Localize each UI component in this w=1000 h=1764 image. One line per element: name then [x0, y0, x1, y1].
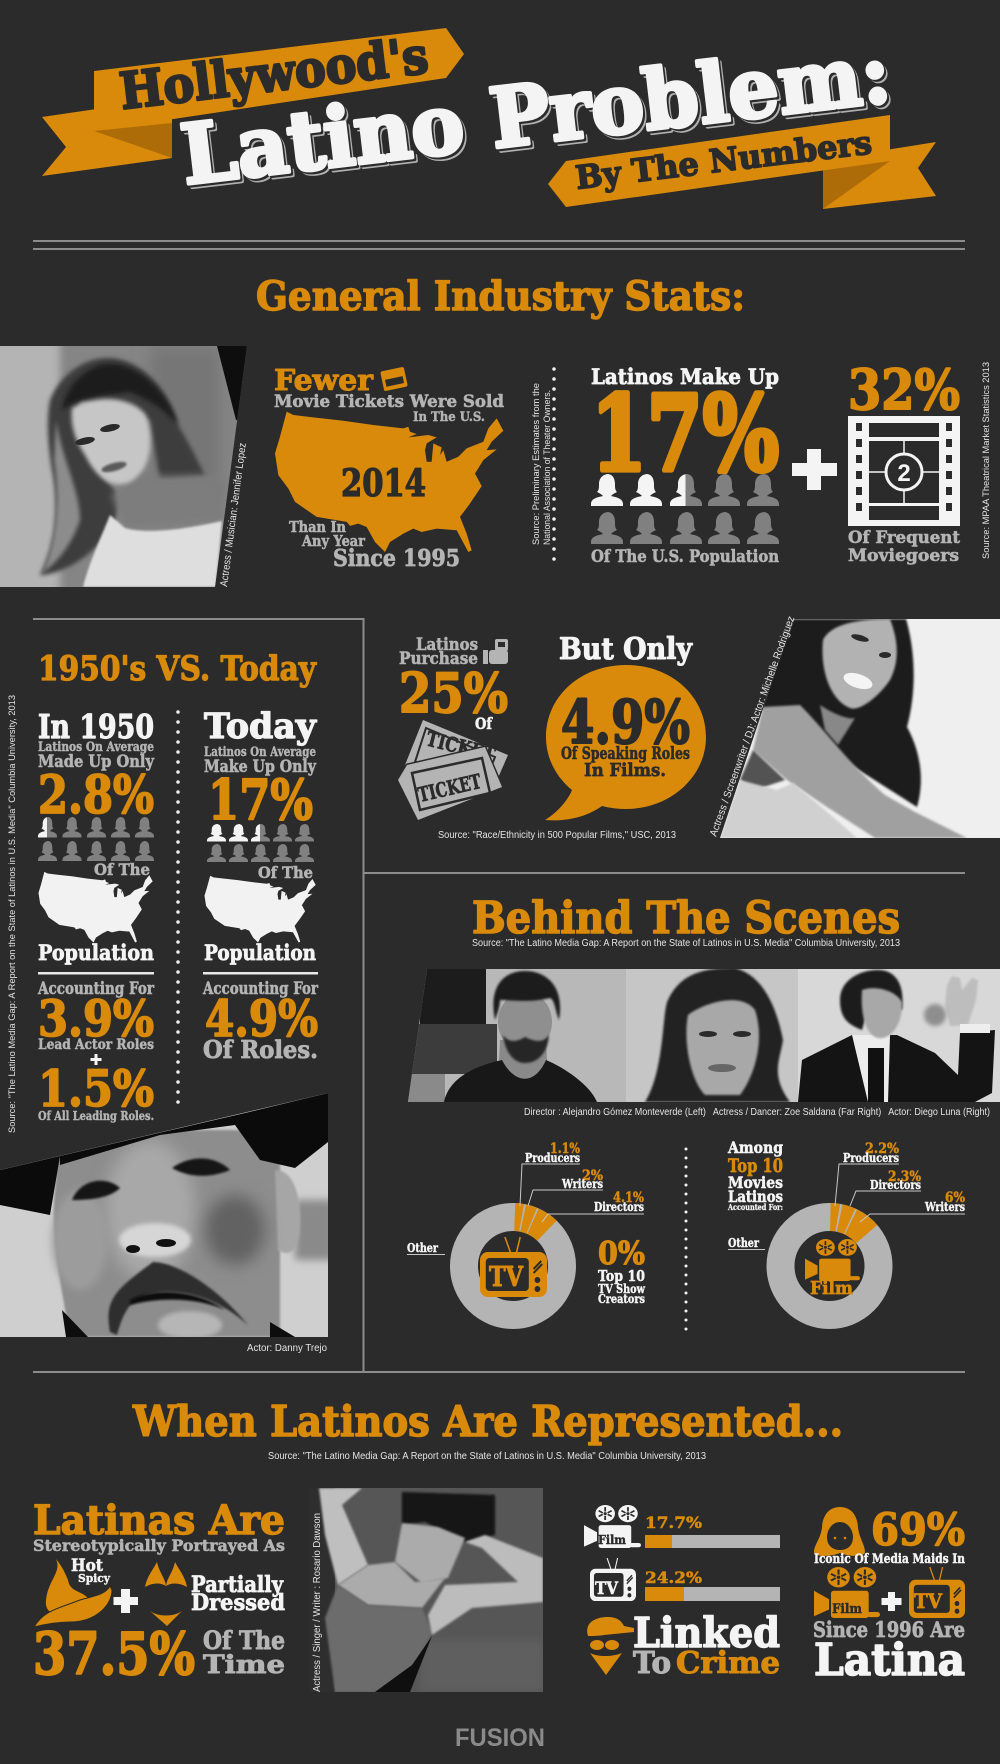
label: directors [850, 1169, 921, 1206]
label: producers: Producers [525, 1151, 580, 1165]
stat: TV linked to crime bar: 24.2% [645, 1568, 702, 1587]
icon: TV [909, 1567, 965, 1618]
icon: TV [480, 1237, 547, 1297]
source: theater owners: Source: Preliminary Estimates from the [531, 383, 542, 545]
text: among top 10 movies: Movies [728, 1173, 783, 1192]
stat: fewer tickets with map [274, 363, 504, 572]
stat: 0 percent top 10 TV show creators: 0% [598, 1234, 645, 1272]
chart: TV donut: TV [489, 1262, 524, 1293]
icon: film camera [814, 1567, 880, 1618]
icon: tickets: TICKET [416, 769, 484, 807]
stat: latinos purchase 25 percent of tickets: Of [475, 714, 493, 733]
title banner: Hollywood's [42, 26, 464, 176]
stat: latinos purchase 25 percent of tickets: 25% [399, 661, 508, 725]
label: writers [860, 1190, 965, 1222]
chart: film donut: Film [810, 1278, 853, 1299]
column: today: Make Up Only [204, 757, 317, 777]
stat: film linked to crime bar: 17.7% [645, 1513, 702, 1532]
stat: fewer tickets with map: 2014 [341, 461, 426, 505]
icon: ticket [380, 367, 408, 391]
title: Latino Problem: Latino Problem: [178, 27, 897, 206]
column: in 1950: In 1950 [38, 707, 154, 746]
text: among top 10 movies: Accounted For: [727, 1203, 783, 1213]
stat: 69 percent iconic media maids: 69% [871, 1505, 965, 1556]
column: today: Latinos On Average [204, 745, 316, 760]
text: among top 10 movies: Among [727, 1138, 783, 1157]
icon: hand with money [483, 639, 508, 664]
stat: fewer tickets with map: Movie Tickets Were Sold [274, 392, 504, 412]
stat: fewer tickets with map: In The U.S. [413, 410, 485, 425]
source: Columbia University: Source: "The Latino Media Gap: A Report on the State of Latinos in U.S. Media" Columbia University, 2013 [7, 695, 18, 1133]
column: in 1950: Lead Actor Roles [38, 1037, 154, 1053]
source: MPAA: Source: MPAA Theatrical Market Statistics 2013 [981, 362, 992, 559]
icon: bandit [587, 1617, 634, 1675]
panel: latinas stereotypes: Stereotypically Portrayed As [33, 1536, 285, 1555]
stat: but only 4.9 percent bubble: In Films. [584, 760, 666, 781]
column: in 1950: 3.9% [38, 989, 154, 1048]
stat: 69 percent iconic media maids: Since 1996 Are [813, 1617, 965, 1642]
icon: film camera [805, 1239, 860, 1281]
plus sign [882, 1592, 902, 1611]
column: in 1950: Of All Leading Roles. [38, 1108, 154, 1123]
stat: latinos 17 percent of population: Of The U.S. Population [591, 547, 779, 567]
stat: latinos 17 percent of population [591, 364, 779, 567]
label: writers [528, 1168, 603, 1206]
stat: 69 percent iconic media maids [813, 1505, 965, 1686]
icon: film countdown [848, 416, 960, 526]
text: linked to crime: Crime [676, 1646, 780, 1681]
label: producers: Producers [843, 1151, 899, 1165]
stat: latinos purchase 25 percent of tickets: Latinos [416, 635, 478, 655]
stat: fewer tickets with map: Since 1995 [333, 545, 460, 572]
stat: TV linked to crime bar [590, 1558, 780, 1601]
heading: 1950's vs today: 1950's VS. Today [38, 649, 317, 689]
column: today [202, 706, 319, 1064]
stat: latinos 17 percent of population: Latinos Make Up [591, 364, 779, 389]
stat: but only 4.9 percent bubble: But Only [559, 632, 693, 667]
text: among top 10 movies: Top 10 [728, 1155, 783, 1177]
label: writers: 6% [945, 1190, 965, 1206]
stat: latinos purchase 25 percent of tickets: Purchase [399, 649, 478, 669]
source: USC: Source: "Race/Ethnicity in 500 Popular Films," USC, 2013 [438, 830, 676, 841]
map: USA 2014 [275, 412, 503, 552]
label: producers [835, 1141, 899, 1206]
stat: fewer tickets with map: Fewer [274, 363, 374, 397]
title: Latino Problem: Latino Problem: [176, 25, 895, 204]
text: linked to crime: To [633, 1646, 671, 1681]
stat: 69 percent iconic media maids: TV [914, 1589, 942, 1613]
source: theater owners: National Association of Theater Owners. [542, 390, 553, 545]
stat: 69 percent iconic media maids: Latina [814, 1635, 965, 1686]
stat: but only 4.9 percent bubble [545, 632, 706, 820]
caption: Jennifer Lopez: Actress / Musician: Jennifer Lopez [218, 442, 249, 587]
icon: tickets [398, 720, 508, 820]
photo: Rosario Dawson [310, 1488, 543, 1692]
stat: 0 percent top 10 TV show creators: Top 10 [598, 1267, 645, 1285]
stat: film linked to crime bar: Film [598, 1533, 626, 1547]
label: directors [542, 1190, 644, 1222]
stat: 0 percent top 10 TV show creators [598, 1234, 646, 1306]
column: in 1950: 2.8% [38, 765, 154, 826]
icon: bikini [145, 1562, 187, 1626]
plus sign [792, 449, 837, 490]
column: today: Of The [258, 863, 313, 882]
heading: When Latinos Are Represented: When Latinos Are Represented... [132, 1397, 843, 1446]
title banner: By The Numbers [548, 115, 936, 209]
column: today: 4.9% [205, 989, 318, 1048]
column: in 1950 [37, 707, 155, 1123]
text: among top 10 movies: Latinos [728, 1187, 783, 1206]
column: in 1950: Latinos On Average [38, 740, 154, 755]
icon row: people [591, 474, 779, 544]
title banner: Hollywood's: Hollywood's [116, 26, 431, 121]
label: writers: Writers [924, 1200, 965, 1214]
label: directors: Directors [594, 1200, 644, 1214]
logo: Fusion: FUSION [455, 1724, 545, 1752]
label: producers: 1.1% [550, 1141, 580, 1157]
panel: latinas stereotypes: Hot [71, 1556, 103, 1576]
chart: TV donut [407, 1141, 644, 1331]
title: Latino Problem: Latino Problem: [180, 29, 899, 207]
column: in 1950: 1.5% [38, 1059, 154, 1118]
heading: General Industry Stats: General Industry Stats: [256, 273, 745, 320]
column: in 1950: Accounting For [37, 979, 155, 999]
stat: but only 4.9 percent bubble: 4.9% [561, 688, 690, 758]
text: linked to crime: Linked [633, 1609, 780, 1657]
label: writers: 2% [582, 1168, 603, 1184]
stat: 32 percent moviegoers with film frame: Moviegoers [848, 546, 959, 566]
text: among top 10 movies [727, 1138, 783, 1213]
map: USA [38, 872, 153, 942]
stat: film linked to crime bar [584, 1505, 780, 1548]
panel: latinas stereotypes: Dressed [191, 1590, 285, 1616]
icon row: people [207, 824, 314, 862]
stat: 0 percent top 10 TV show creators: Creators [598, 1292, 645, 1306]
photo: Jennifer Lopez [0, 340, 250, 600]
panel: 1950s vs today [7, 649, 319, 1133]
plus sign [114, 1589, 138, 1613]
panel: latinas stereotypes: Time [203, 1650, 285, 1679]
stat: 69 percent iconic media maids: Film [832, 1602, 862, 1617]
label: writers: Writers [561, 1177, 603, 1191]
heading: Behind The Scenes: Behind The Scenes [472, 893, 900, 944]
stat: but only 4.9 percent bubble: Of Speaking Roles [561, 744, 690, 764]
column: in 1950: Population [38, 940, 154, 965]
heading: Behind The Scenes: Source: "The Latino Media Gap: A Report on the State of Latinos in U.S. Media" Columbia University, 2013 [472, 938, 900, 949]
map: USA [204, 876, 316, 943]
panel: latinas stereotypes: 37.5% [33, 1620, 195, 1688]
icon: film camera [584, 1505, 641, 1548]
caption: Danny Trejo: Actor: Danny Trejo [247, 1342, 327, 1354]
photo: Danny Trejo [0, 1090, 335, 1340]
panel: latinas stereotypes: Of The [203, 1626, 285, 1655]
label: directors: 4.1% [613, 1190, 644, 1206]
panel: latinas stereotypes [33, 1497, 285, 1688]
stat: latinos 17 percent of population: 17% [591, 372, 779, 495]
icon: tickets: TICKET [424, 727, 498, 767]
label: directors: 2.3% [888, 1169, 921, 1185]
stat: 32 percent moviegoers with film frame: 32% [848, 357, 960, 422]
chart: film donut [728, 1141, 965, 1332]
column: today: Population [204, 940, 316, 965]
column: in 1950: Made Up Only [38, 752, 155, 772]
icon row: people [38, 817, 154, 861]
label: other: Other [407, 1241, 439, 1255]
column: in 1950: Of The [94, 860, 150, 879]
stat: latinos purchase 25 percent of tickets [398, 635, 508, 820]
column: today: Today [204, 706, 318, 747]
stat: 32 percent moviegoers with film frame: Of Frequent [848, 528, 960, 548]
column: today: Of Roles. [203, 1035, 318, 1064]
label: other: Other [728, 1236, 760, 1250]
source: theater owners [531, 383, 553, 545]
stat: fewer tickets with map: Any Year [301, 532, 366, 550]
stat: TV linked to crime bar: TV [595, 1579, 619, 1599]
heading: When Latinos Are Represented: Source: "The Latino Media Gap: A Report on the State of Latinos in U.S. Media" Columbia University, 2013 [268, 1451, 706, 1462]
photo strip: Monteverde, Saldana, Luna [405, 968, 1000, 1102]
label: producers [520, 1141, 580, 1206]
icon: maid [814, 1507, 865, 1556]
column: today: 17% [208, 767, 313, 832]
label: producers: 2.2% [865, 1141, 899, 1157]
caption: Rosario Dawson: Actress / Singer / Writer : Rosario Dawson [311, 1513, 323, 1692]
panel: latinas stereotypes: Latinas Are [33, 1497, 285, 1544]
text: linked to crime [587, 1609, 780, 1681]
icon: film countdown: 2 [897, 460, 911, 487]
caption: Michelle Rodriguez: Actress / Screenwriter / DJ: Actor: Michelle Rodriguez [708, 615, 797, 838]
column: today: Accounting For [202, 979, 319, 999]
title banner: By The Numbers: By The Numbers [573, 123, 874, 197]
stat: 69 percent iconic media maids: Iconic Of Media Maids In [814, 1552, 965, 1567]
panel: latinas stereotypes: Partially [191, 1572, 284, 1598]
speech bubble [545, 665, 706, 820]
label: directors: Directors [870, 1178, 921, 1192]
icon: chili and flame [34, 1559, 112, 1627]
stat: 0 percent top 10 TV show creators: TV Show [598, 1282, 646, 1296]
icon: TV [590, 1558, 636, 1601]
photo: Michelle Rodriguez [720, 619, 1000, 839]
panel: latinas stereotypes: Spicy [78, 1572, 111, 1585]
stat: fewer tickets with map: Than In [289, 518, 346, 536]
stat: 32 percent moviegoers with film frame [848, 357, 960, 566]
